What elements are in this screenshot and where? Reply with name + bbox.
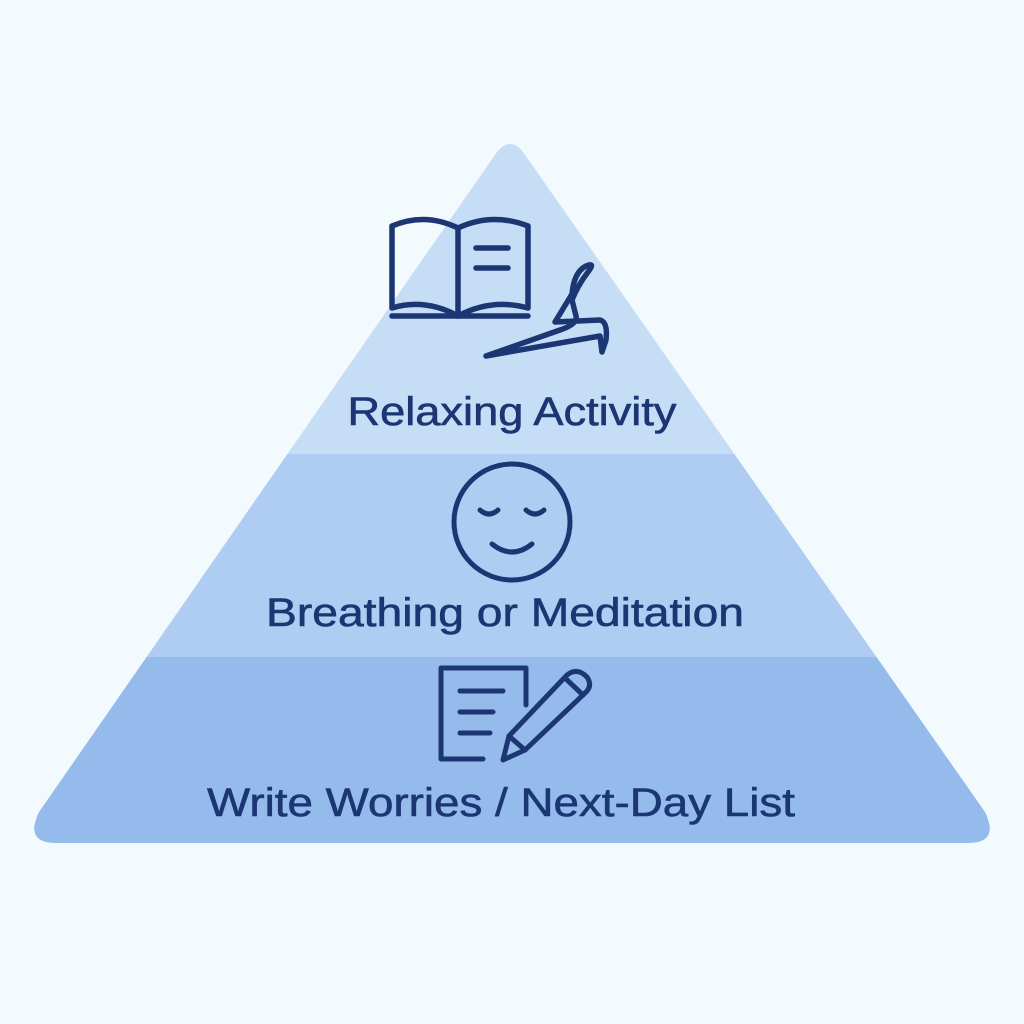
pyramid (0, 130, 1024, 847)
label: breathing: Breathing or Meditation (266, 591, 744, 635)
tier: top (288, 144, 734, 454)
icon: book and yoga (392, 219, 606, 356)
icon: notes and pencil (441, 668, 590, 760)
label: relaxing activity: Relaxing Activity (348, 390, 676, 434)
tier: middle (146, 454, 876, 657)
tier: bottom (0, 657, 1024, 847)
label: write worries: Write Worries / Next-Day List (207, 781, 795, 825)
icon: smiley (454, 464, 570, 580)
